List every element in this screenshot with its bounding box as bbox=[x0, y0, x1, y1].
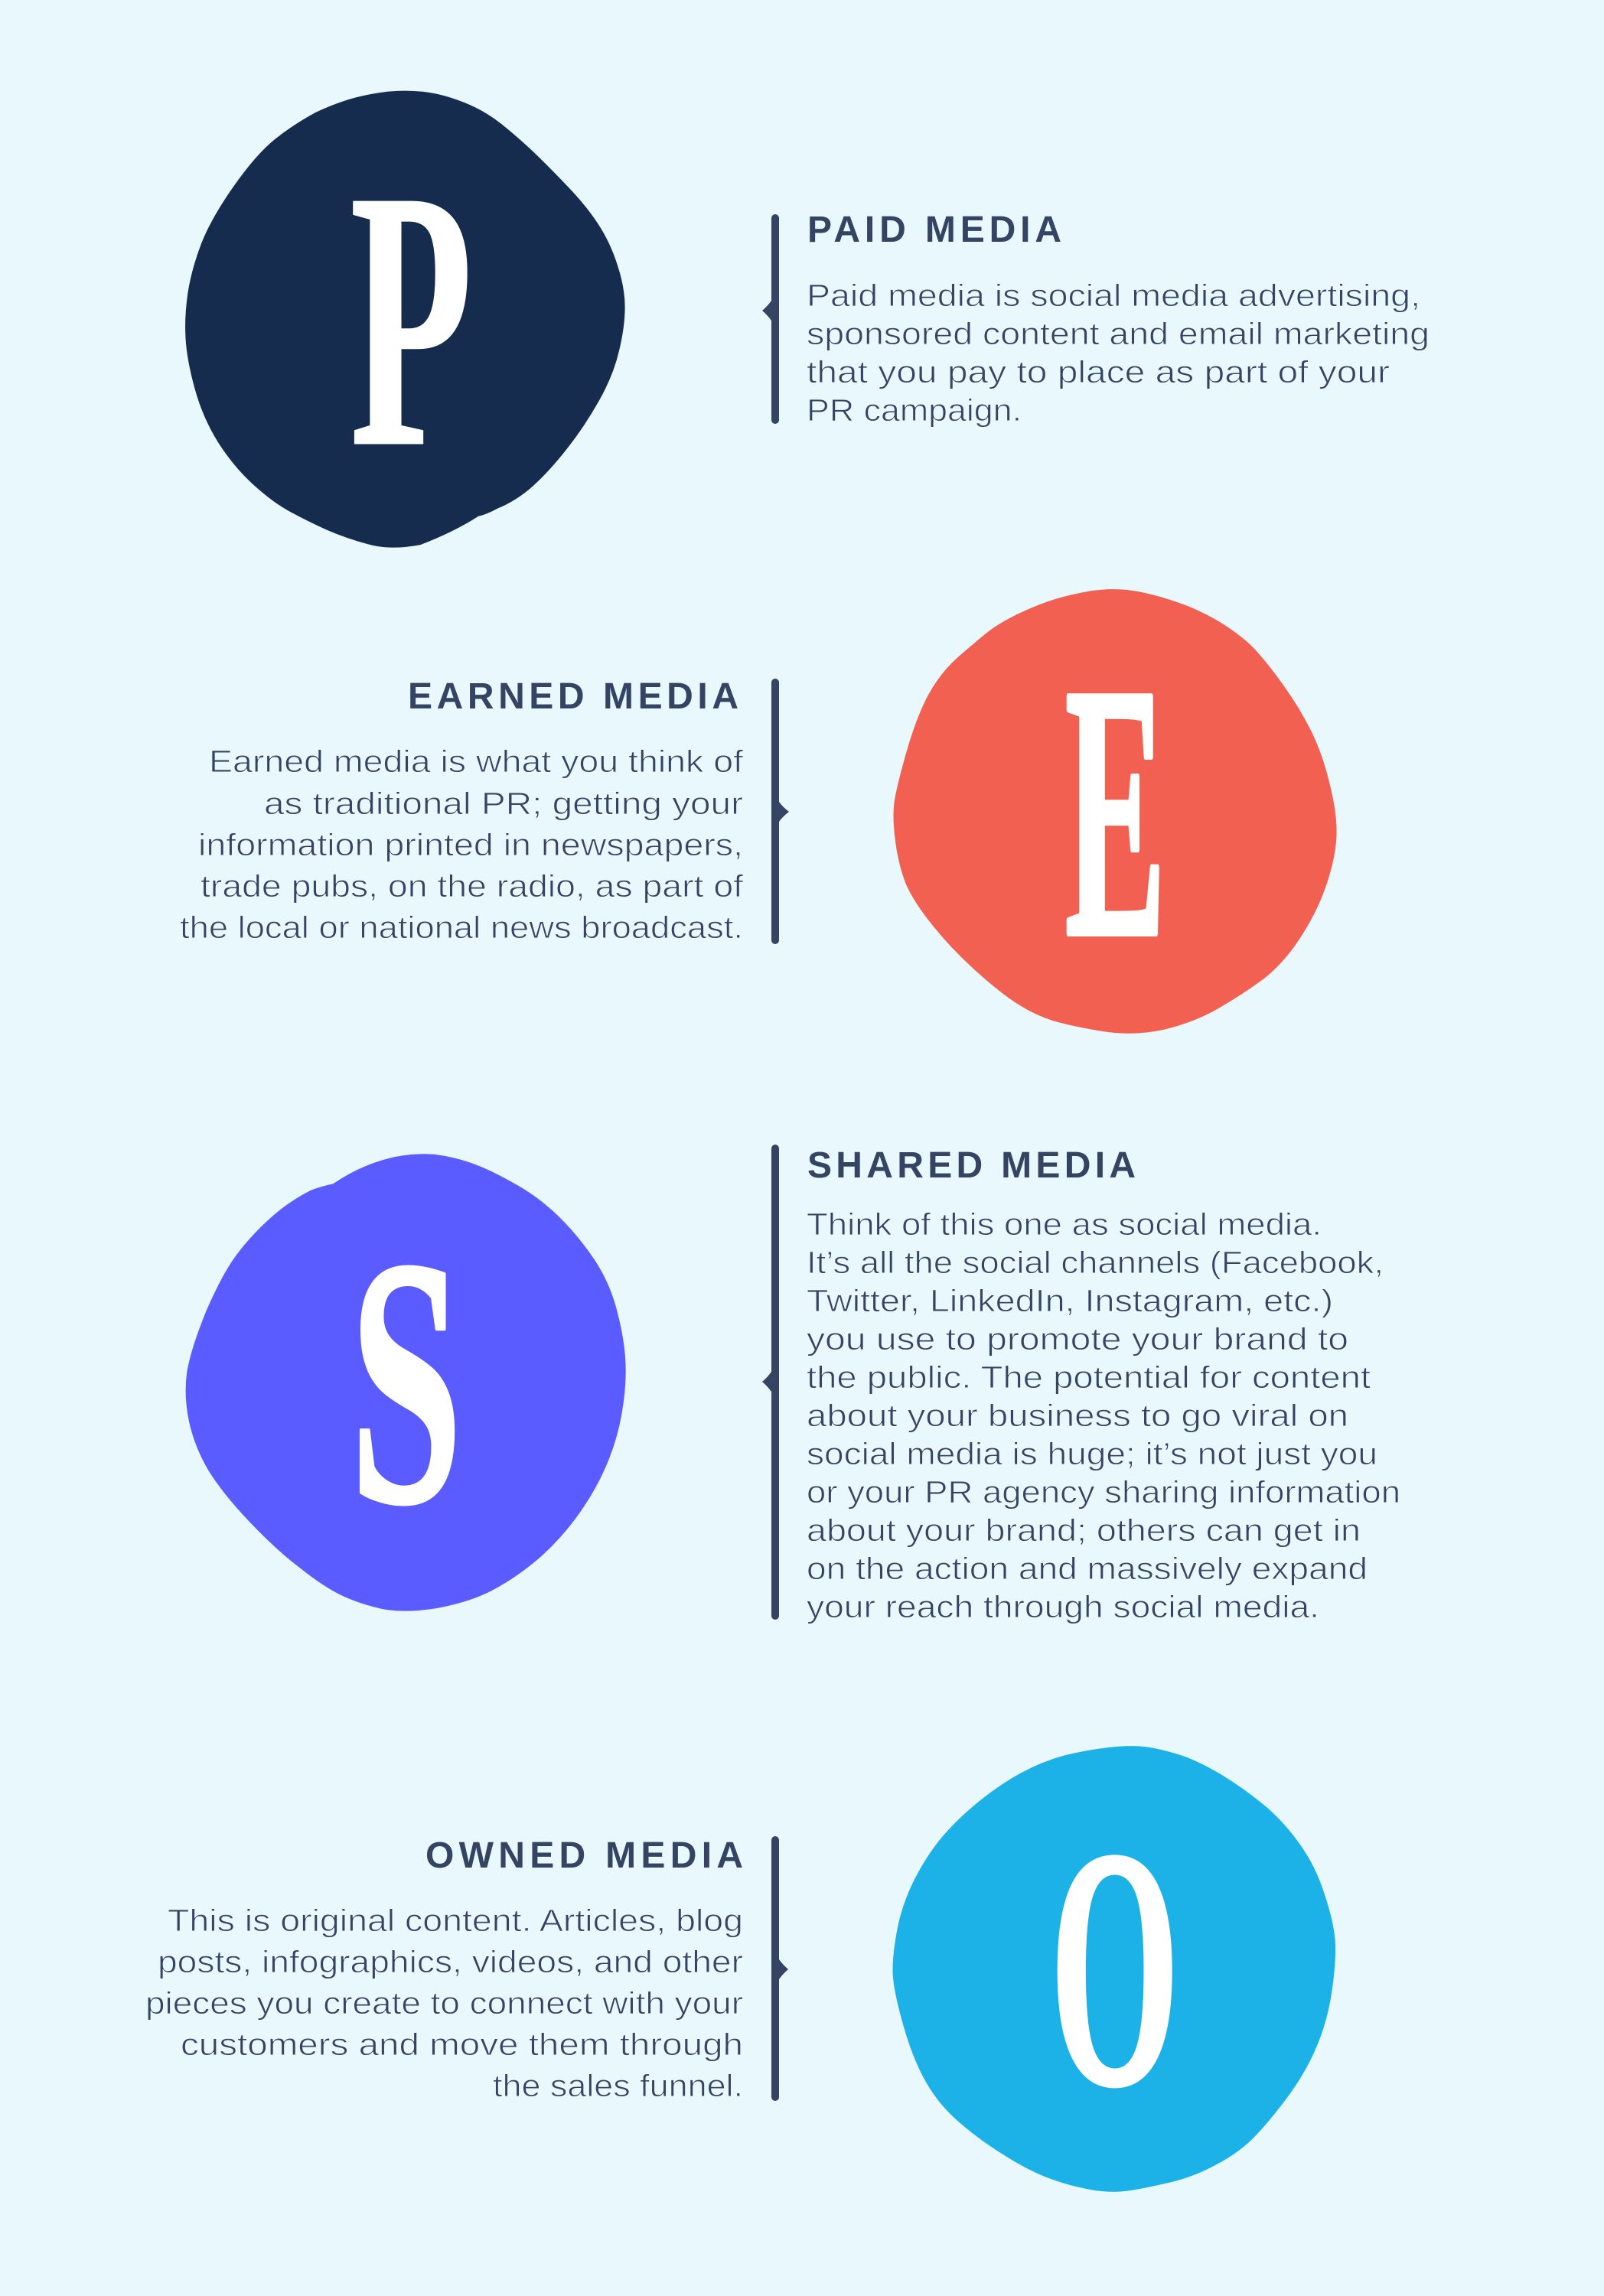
blob: owned media bbox=[893, 1746, 1335, 2192]
blob: earned media bbox=[894, 589, 1337, 1034]
heading: owned media: OWNED MEDIA bbox=[425, 1835, 743, 1876]
heading: paid media: PAID MEDIA bbox=[807, 210, 1061, 250]
text: paid media description: Paid media is social media advertising, bbox=[807, 278, 1420, 313]
text: paid media description: sponsored content and email marketing bbox=[807, 316, 1430, 351]
text: shared media description: about your brand; others can get in bbox=[807, 1513, 1361, 1548]
text: earned media description: information printed in newspapers, bbox=[198, 827, 743, 862]
bracket: paid media bbox=[762, 214, 779, 424]
text: paid media description bbox=[807, 278, 1430, 428]
text: paid media description: that you pay to place as part of your bbox=[807, 354, 1390, 389]
letter: E: E bbox=[1065, 612, 1166, 1012]
text: shared media description: on the action and massively expand bbox=[807, 1551, 1368, 1586]
text: shared media description: the public. The potential for content bbox=[807, 1360, 1371, 1395]
letter: S: S bbox=[350, 1186, 462, 1578]
text: paid media description: PR campaign. bbox=[807, 392, 1022, 428]
panel: paid media bbox=[185, 91, 1430, 548]
text: earned media description: trade pubs, on the radio, as part of bbox=[200, 868, 744, 904]
text: earned media description: as traditional PR; getting your bbox=[264, 786, 743, 821]
panel: earned media bbox=[180, 589, 1337, 1034]
bracket: shared media bbox=[762, 1145, 779, 1620]
text: shared media description: It’s all the social channels (Facebook, bbox=[807, 1245, 1384, 1280]
text: owned media description: pieces you create to connect with your bbox=[145, 1985, 743, 2021]
panel: owned media bbox=[145, 1746, 1335, 2192]
text: owned media description bbox=[145, 1903, 743, 2103]
text: owned media description: This is original content. Articles, blog bbox=[168, 1903, 743, 1938]
letter: O: O bbox=[1050, 1779, 1179, 2158]
text: shared media description: your reach through social media. bbox=[807, 1589, 1319, 1624]
bracket: earned media bbox=[771, 679, 789, 944]
text: earned media description: the local or national news broadcast. bbox=[180, 910, 743, 945]
text: owned media description: the sales funnel. bbox=[493, 2068, 743, 2103]
text: owned media description: posts, infographics, videos, and other bbox=[158, 1944, 743, 1979]
heading: shared media: SHARED MEDIA bbox=[807, 1145, 1136, 1186]
text: shared media description: about your business to go viral on bbox=[807, 1398, 1348, 1433]
letter: P: P bbox=[350, 115, 473, 525]
blob: shared media bbox=[186, 1154, 626, 1611]
text: earned media description: Earned media is what you think of bbox=[209, 744, 744, 779]
text: earned media description bbox=[180, 744, 744, 945]
bracket: owned media bbox=[771, 1836, 788, 2101]
text: shared media description: social media is huge; it’s not just you bbox=[807, 1436, 1377, 1471]
text: shared media description: Twitter, LinkedIn, Instagram, etc.) bbox=[807, 1283, 1333, 1318]
heading: earned media: EARNED MEDIA bbox=[408, 676, 738, 717]
text: shared media description: Think of this one as social media. bbox=[807, 1207, 1322, 1242]
text: owned media description: customers and move them through bbox=[181, 2027, 743, 2062]
blob: paid media bbox=[185, 91, 625, 548]
text: shared media description bbox=[807, 1207, 1400, 1624]
panel: shared media bbox=[186, 1145, 1400, 1624]
text: shared media description: you use to promote your brand to bbox=[807, 1321, 1348, 1356]
text: shared media description: or your PR agency sharing information bbox=[807, 1474, 1400, 1509]
